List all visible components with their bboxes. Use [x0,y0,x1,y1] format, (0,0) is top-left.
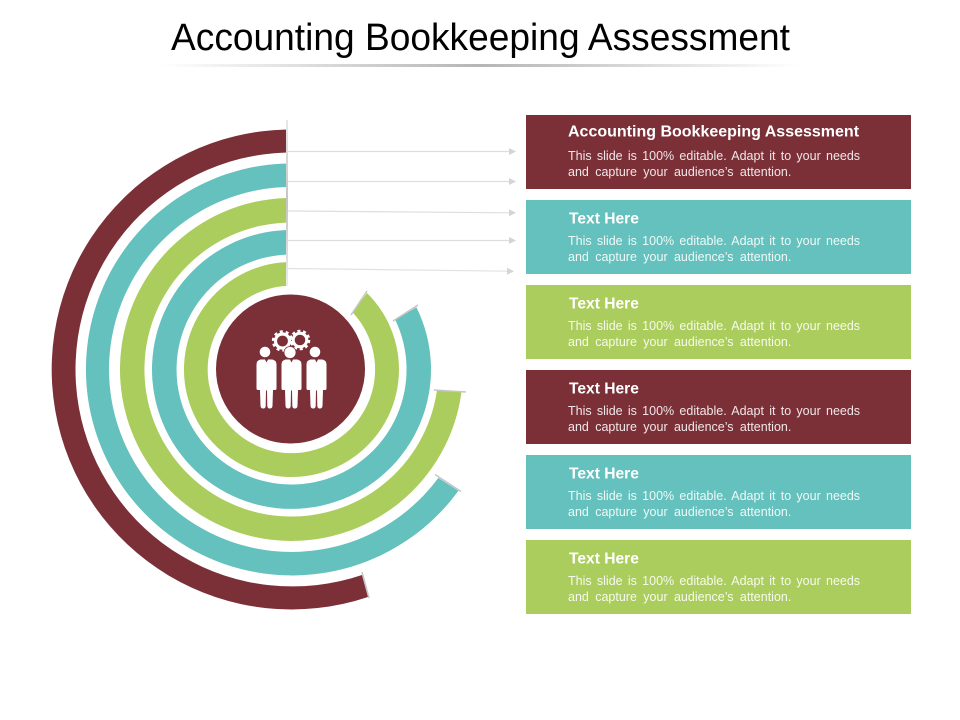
panel: text here teal 1 [526,200,911,274]
ring 3: green [120,198,466,541]
arrow 3 [288,209,516,216]
icon: person left [256,346,276,408]
arrow 2 [288,178,516,185]
icon: person middle [282,346,302,408]
panel heading: Text Here [569,550,639,568]
arrow 5 [288,268,514,275]
panel body line 2: and capture your audience’s attention. [568,505,791,519]
center circle [216,294,365,444]
panel: text here teal 2 [526,455,911,529]
icon: gear left [273,332,292,350]
panel heading: Text Here [569,466,639,482]
panel body line 2: and capture your audience’s attention. [568,165,791,179]
panel body line 1: This slide is 100% editable. Adapt it to your needs [568,574,860,588]
ring 5: green [184,262,399,477]
panel body line 1: This slide is 100% editable. Adapt it to your needs [568,149,860,163]
panel: text here maroon [526,370,911,444]
arrow 4 [288,237,516,244]
title: Accounting Bookkeeping Assessment [171,17,790,59]
panel body line 1: This slide is 100% editable. Adapt it to your needs [568,234,860,248]
arrow 1 [288,148,516,155]
panel: accounting bookkeeping assessment [526,115,911,189]
ring 2: teal [86,164,461,575]
icon: team with gears [256,331,326,408]
panel: text here green 1 [526,285,911,359]
panel body line 1: This slide is 100% editable. Adapt it to your needs [568,489,860,503]
ring 1: maroon [52,130,369,609]
panel heading: Accounting Bookkeeping Assessment [568,124,860,141]
ring 4: teal [152,230,431,509]
panel body line 1: This slide is 100% editable. Adapt it to your needs [568,319,860,333]
panel heading: Text Here [569,296,639,312]
panel body line 2: and capture your audience’s attention. [568,590,791,604]
panel heading: Text Here [569,210,639,228]
panel body line 2: and capture your audience’s attention. [568,335,791,349]
panel: text here green 2 [526,540,911,614]
icon: gear right [291,331,309,349]
icon: person right [306,346,326,408]
panel body line 2: and capture your audience’s attention. [568,420,791,434]
panel heading: Text Here [569,380,639,398]
panel body line 2: and capture your audience’s attention. [568,250,791,264]
panel body line 1: This slide is 100% editable. Adapt it to your needs [568,404,860,418]
concentric ring chart [52,130,466,609]
